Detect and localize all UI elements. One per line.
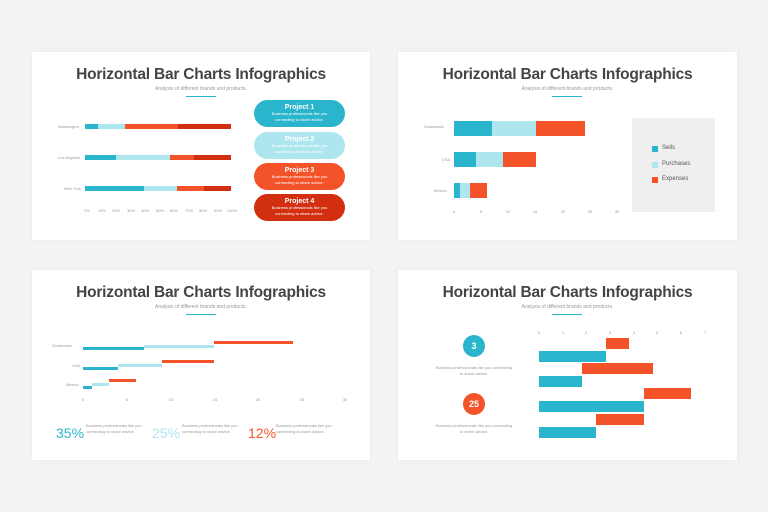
- callout: project 2: Project 2: [285, 136, 314, 143]
- icon: circle 3: [463, 335, 485, 357]
- stat: 25%: 25%: [152, 425, 180, 441]
- callout: project 3: Business professionals like you: [272, 174, 327, 179]
- bar chart: Guatemala: [52, 343, 72, 348]
- callout: project 2: [254, 132, 345, 159]
- bar chart: 10: [169, 397, 173, 402]
- bar chart: 2: [585, 330, 587, 335]
- callout: project 4: [254, 194, 345, 221]
- callout: project 1: [254, 100, 345, 127]
- stat: 12%: [248, 423, 332, 441]
- title: Horizontal Bar Charts Infographics: [76, 284, 326, 301]
- bar chart: Mexico: [66, 382, 79, 387]
- bar chart: 100%: [227, 208, 237, 213]
- title: Horizontal Bar Charts Infographics: [443, 66, 692, 83]
- bar chart: Guatemala: [424, 124, 444, 129]
- bar chart: 5: [656, 330, 658, 335]
- bar chart: 30: [343, 397, 347, 402]
- callout: project 4: connecting to share advice.: [275, 211, 324, 216]
- bar chart: 30%: [127, 208, 135, 213]
- bar chart: [538, 330, 706, 438]
- callout: project 1: Project 1: [285, 104, 314, 111]
- panel: 100% stacked bars: [32, 52, 370, 240]
- callout: project 1: connecting to share advice.: [275, 117, 324, 122]
- bar chart: 90%: [214, 208, 222, 213]
- callout: project 4: Project 4: [285, 198, 314, 205]
- subtitle: Analysis of different brands and products.: [155, 304, 247, 310]
- icon: circle 25: [463, 393, 485, 415]
- bar chart: USA: [442, 157, 450, 162]
- bar chart: 50%: [156, 208, 164, 213]
- bar chart: 4: [633, 330, 635, 335]
- title: Horizontal Bar Charts Infographics: [443, 284, 692, 301]
- bar chart: 5: [480, 209, 482, 214]
- bar chart: 70%: [185, 208, 193, 213]
- bar chart: [58, 124, 237, 213]
- bar chart: Los Angeles: [58, 155, 80, 160]
- bar chart: 40%: [141, 208, 149, 213]
- bar chart: 3: [609, 330, 611, 335]
- bar chart: 10%: [98, 208, 106, 213]
- subtitle: Analysis of different brands and products.: [522, 304, 613, 310]
- bar chart: 0: [453, 209, 455, 214]
- stat: 35%: 35%: [56, 425, 84, 441]
- callout: project 1: Business professionals like you: [272, 111, 327, 116]
- bar chart: 60%: [170, 208, 178, 213]
- subtitle: Analysis of different brands and products.: [155, 86, 247, 92]
- text block 1: Business professionals like you connecting to share advice.: [436, 365, 512, 376]
- subtitle: Analysis of different brands and products.: [522, 86, 613, 92]
- bar chart: 80%: [199, 208, 207, 213]
- callout: project 3: [254, 163, 345, 190]
- callout: project 3: Project 3: [285, 167, 314, 174]
- bar chart: 30: [615, 209, 619, 214]
- bar chart: 20: [256, 397, 260, 402]
- stat: 35%: Business professionals like you connecting to share advice.: [86, 423, 142, 434]
- bar chart: 0: [538, 330, 540, 335]
- bar chart: 6: [680, 330, 682, 335]
- bar chart: 25: [588, 209, 592, 214]
- bar chart: 0: [82, 397, 84, 402]
- bar chart: [424, 121, 620, 214]
- bar chart: [52, 341, 348, 402]
- bar chart: 15: [533, 209, 537, 214]
- stat: 25%: Business professionals like you connecting to share advice.: [182, 423, 238, 434]
- legend: Purchases: [662, 161, 690, 167]
- bar chart: 20%: [112, 208, 120, 213]
- callout: project 2: connecting to share advice.: [275, 149, 324, 154]
- icon: circle 3: 3: [471, 341, 476, 351]
- text block 2: Business professionals like you connecting to share advice.: [436, 423, 512, 434]
- panel: floating bars with stats: [32, 270, 370, 460]
- bar chart: 15: [213, 397, 217, 402]
- stat: 25%: [152, 423, 238, 441]
- stat: 12%: Business professionals like you connecting to share advice.: [276, 423, 332, 434]
- bar chart: 25: [300, 397, 304, 402]
- icon: circle 25: 25: [469, 399, 479, 409]
- panel: stacked bars with legend: [398, 52, 737, 240]
- stat: 35%: [56, 423, 142, 441]
- bar chart: Washington: [58, 124, 79, 129]
- legend: Expenses: [662, 176, 688, 182]
- bar chart: 5: [126, 397, 128, 402]
- legend: Sells: [662, 145, 675, 151]
- bar chart: New York: [64, 186, 81, 191]
- bar chart: 1: [562, 330, 564, 335]
- bar chart: 7: [704, 330, 706, 335]
- legend: [632, 118, 715, 212]
- bar chart: Mexico: [434, 188, 447, 193]
- callout: project 2: Business professionals like you: [272, 143, 327, 148]
- title: Horizontal Bar Charts Infographics: [76, 66, 326, 83]
- bar chart: 20: [561, 209, 565, 214]
- bar chart: 10: [506, 209, 510, 214]
- callout: project 4: Business professionals like you: [272, 205, 327, 210]
- bar chart: USA: [72, 363, 80, 368]
- panel: gantt-like bars: [398, 270, 737, 460]
- stat: 12%: 12%: [248, 425, 276, 441]
- bar chart: 0%: [84, 208, 90, 213]
- callout: project 3: connecting to share advice.: [275, 180, 324, 185]
